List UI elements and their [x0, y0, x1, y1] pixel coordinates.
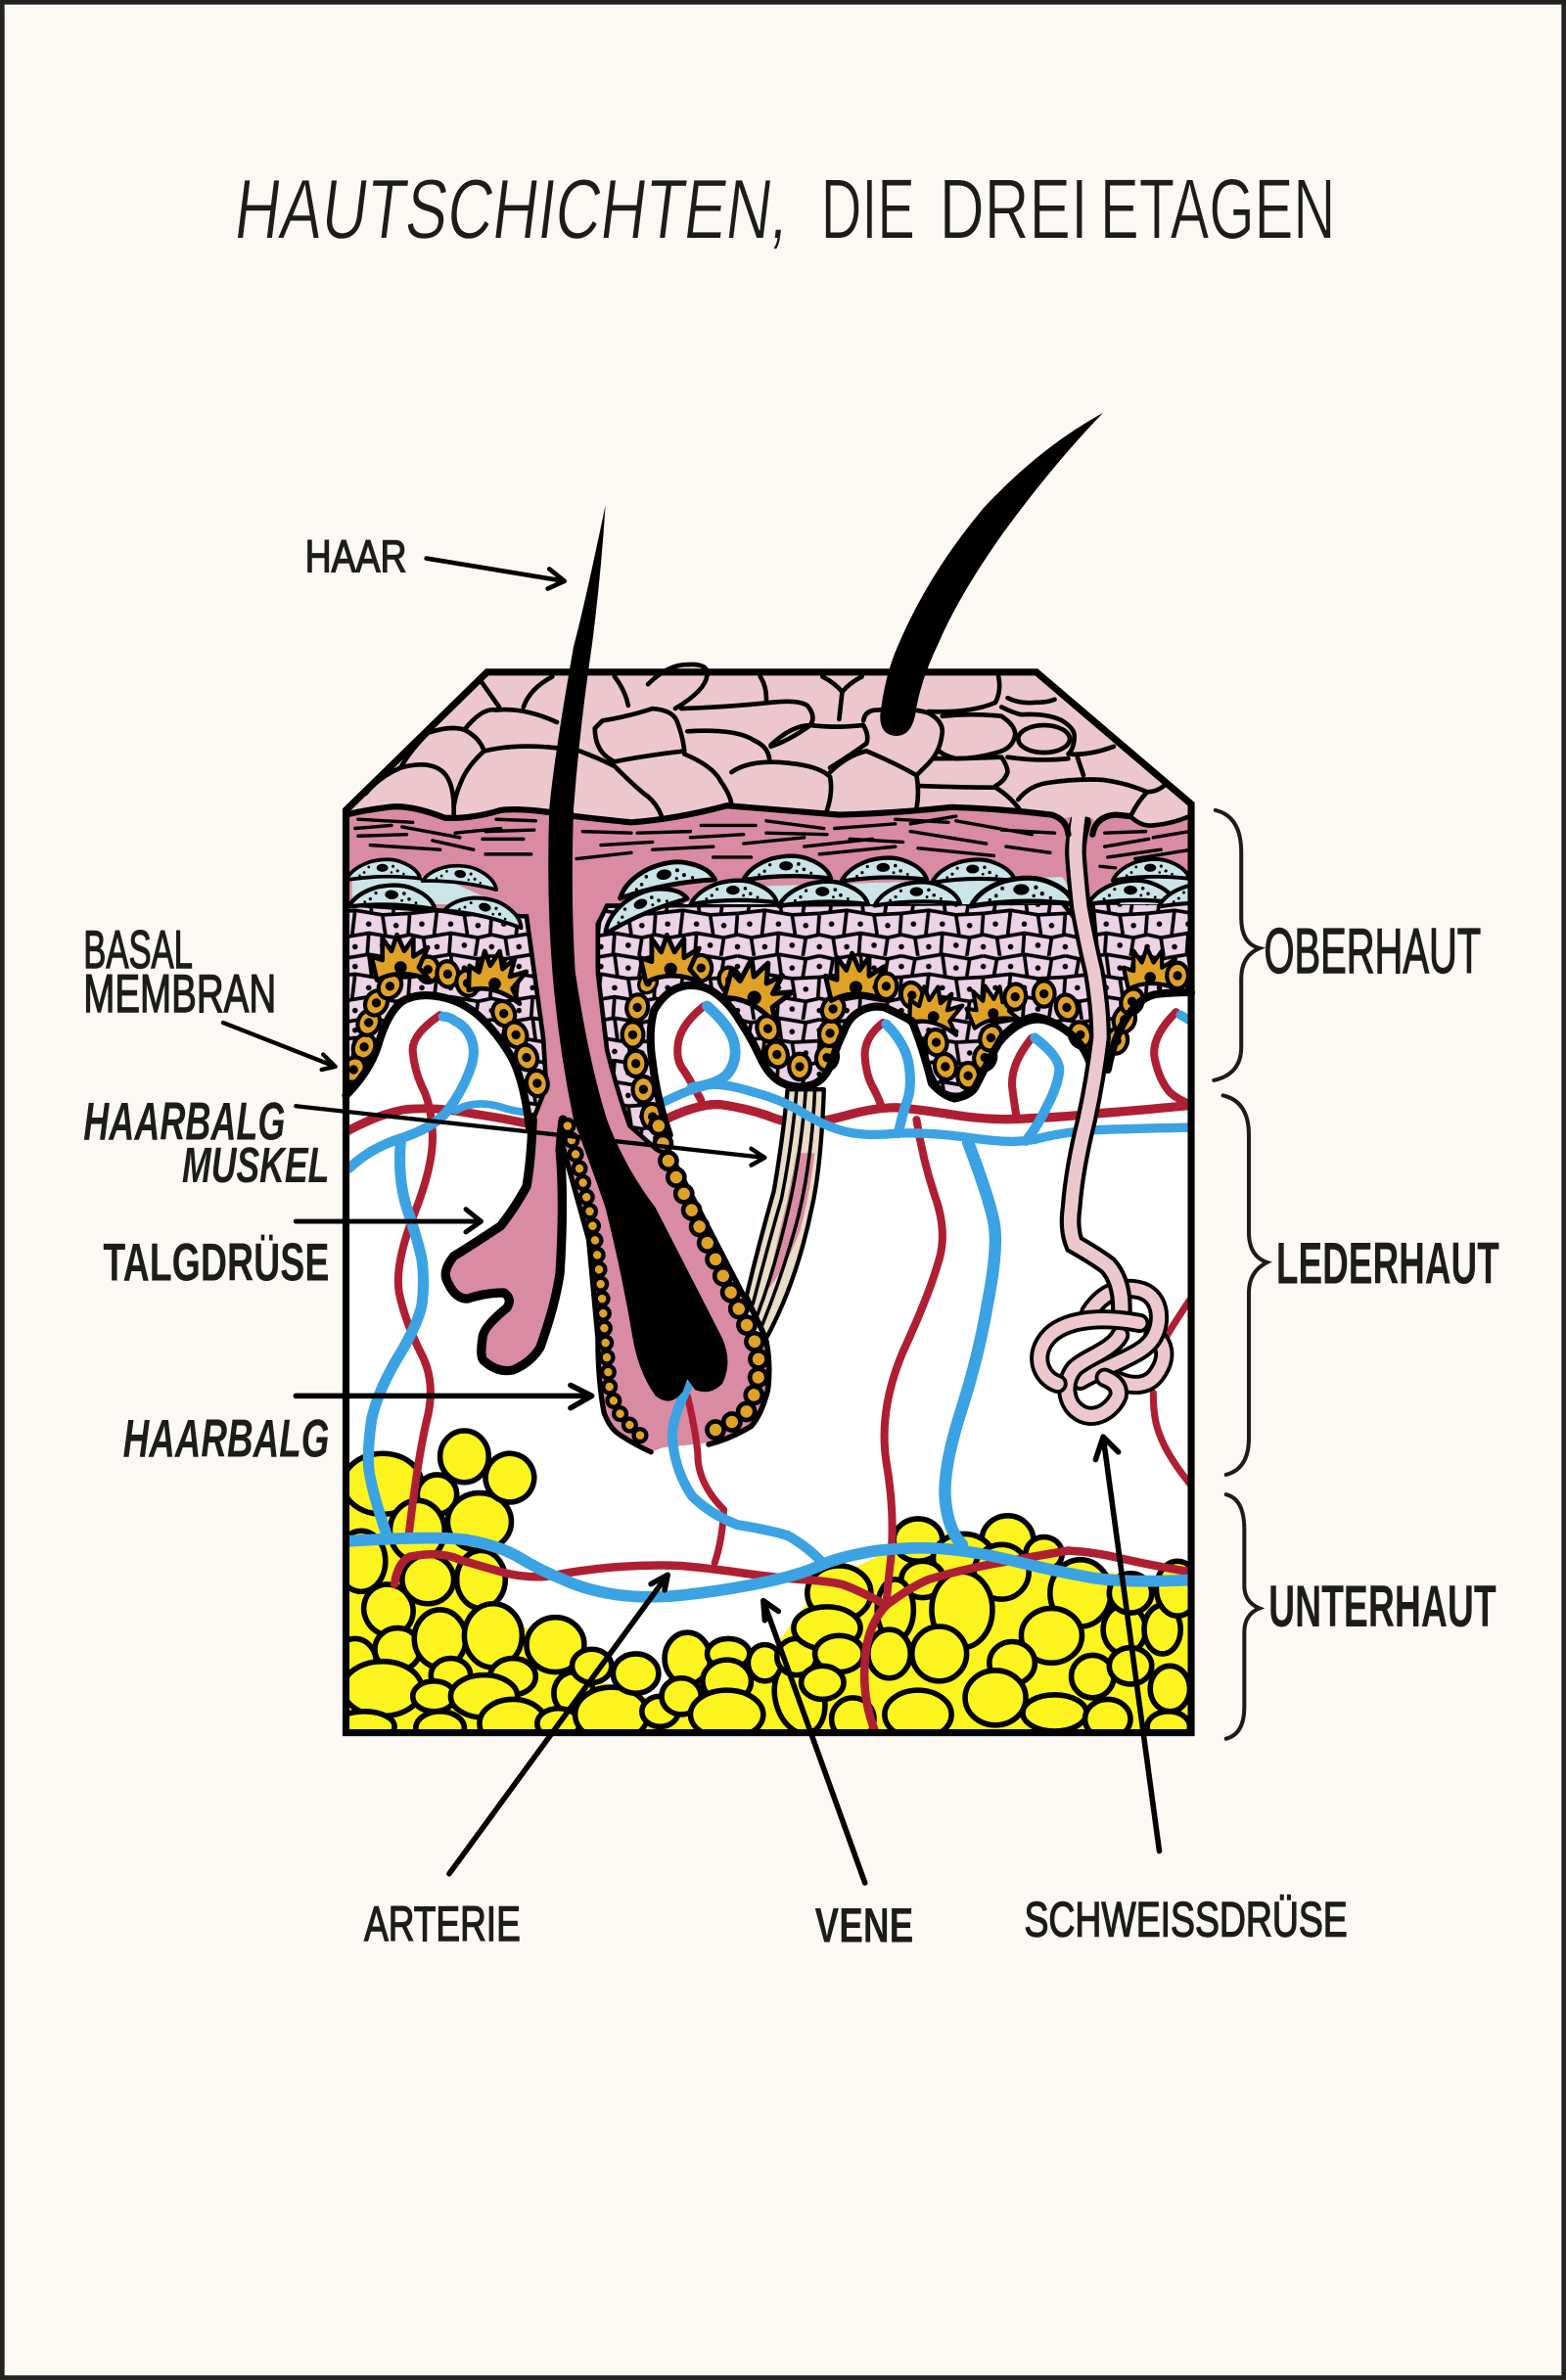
label: Basalmembran — [83, 921, 276, 1024]
brace: Lederhaut — [1223, 1095, 1267, 1475]
hair follicle wall — [563, 1125, 769, 1452]
flattened granular cells — [345, 855, 1240, 934]
label: Vene: VENE — [815, 1898, 913, 1952]
label: Basalmembran: BASAL — [83, 921, 193, 980]
basement membrane line — [345, 985, 1191, 1135]
keratinocyte layer: centre — [598, 902, 1103, 1149]
arrow: Arterie — [449, 1575, 668, 1874]
brace: Unterhaut — [1226, 1494, 1260, 1739]
label: Haar: HAAR — [305, 530, 407, 581]
label: Arterie: ARTERIE — [364, 1897, 521, 1951]
veins: blue vessels — [343, 1006, 1199, 1597]
skin surface cell outlines — [345, 664, 1190, 835]
arrow: Schweissdrüse — [1095, 1437, 1159, 1851]
skin block base — [345, 804, 1191, 1733]
title: DIE — [821, 161, 915, 256]
keratinocyte layer: right — [1092, 902, 1191, 1070]
basal cells — [338, 935, 1188, 1131]
arrow: Vene — [763, 1601, 865, 1883]
label: Haarbalg: HAARBALG — [123, 1409, 329, 1468]
stratum band dashes — [355, 816, 1191, 868]
title — [230, 161, 1335, 256]
skin block outline — [345, 672, 1191, 1733]
brace: Oberhaut — [1214, 810, 1260, 1080]
spinous gaps under flattened cells — [352, 876, 1188, 904]
label: Talgdrüse: TALGDRÜSE — [103, 1234, 329, 1293]
sebaceous gland — [445, 1120, 563, 1371]
follicle blood supply — [672, 1387, 822, 1563]
arrow: Talgdrüse — [296, 1210, 481, 1232]
arrow: Haarbalgmuskel — [296, 1106, 764, 1166]
label: Haarbalgmuskel: MUSKEL — [182, 1137, 329, 1193]
title: DREI — [940, 161, 1088, 256]
stratum band and hair shaft sheath — [345, 804, 1191, 1452]
keratinocyte layer: left — [345, 904, 546, 1128]
label: Haarbalgmuskel: HAARBALG — [83, 1092, 285, 1151]
fat layer: subcutis cells — [334, 1431, 1199, 1748]
title: HAUTSCHICHTEN, — [230, 162, 796, 256]
hair shaft right — [880, 413, 1103, 736]
arrow: Haarbalg — [296, 1386, 592, 1408]
hair follicle muscle — [747, 1089, 824, 1338]
title: ETAGEN — [1100, 161, 1335, 256]
label: Basalmembran: MEMBRAN — [83, 965, 276, 1024]
label: Schweissdrüse: SCHWEISSDRÜSE — [1025, 1892, 1348, 1946]
sweat gland knot — [1039, 804, 1164, 1416]
arteries: red vessels — [345, 1006, 1199, 1733]
label: Haarbalgmuskel — [83, 1092, 329, 1193]
skin surface: horny layer — [345, 672, 1191, 826]
arrow: Basalmembran — [223, 1023, 336, 1070]
arrow: Haar — [427, 559, 565, 589]
hair shaft left — [548, 505, 727, 1401]
